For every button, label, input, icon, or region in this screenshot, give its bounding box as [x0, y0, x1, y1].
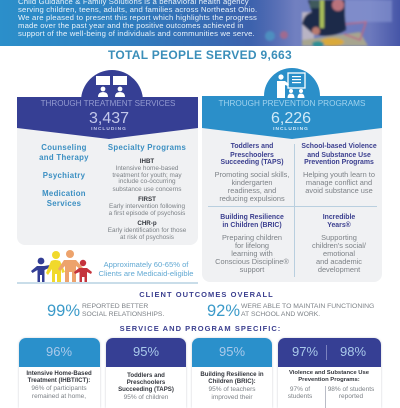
services list: Services	[47, 199, 81, 208]
program: Incredible Years: Incredible	[323, 214, 355, 221]
specialty programs: CHR-p	[137, 220, 157, 227]
header photo	[259, 0, 400, 46]
program: BRIC: in Children (BRIC)	[222, 222, 282, 229]
program: Incredible Years	[312, 214, 366, 274]
card: violence and substance use prevention	[278, 338, 381, 408]
horizontal divider	[208, 206, 377, 207]
specialty programs: Specialty Programs	[108, 143, 186, 152]
stat: 99 percent	[47, 302, 164, 320]
card: BRIC: 95% of teachers	[209, 386, 255, 393]
medicaid note: Clients are Medicaid-eligible	[99, 269, 193, 278]
specialty programs: FIRST	[138, 196, 156, 203]
panel: prevention programs	[202, 68, 382, 282]
card: violence and substance use prevention: reported	[339, 393, 363, 400]
specialty programs: treatment for youth; may	[112, 172, 182, 179]
program: TAPS: readiness, and	[228, 186, 276, 195]
program: school-based violence and substance use prevention: Helping youth learn to	[303, 170, 375, 179]
treatment background card	[17, 118, 198, 245]
program: Incredible Years: children's social/	[312, 241, 366, 250]
card: violence and substance use prevention: 97%	[292, 344, 318, 359]
specialty programs: include co-occurring	[118, 178, 176, 185]
program: Incredible Years: development	[318, 265, 360, 274]
prevention banner with icon	[202, 68, 382, 139]
program: TAPS: Succeeding (TAPS)	[220, 159, 284, 166]
card: IHBT: 96% of participants	[31, 385, 87, 392]
card: TAPS: 95%	[133, 344, 159, 359]
stat: 99 percent: SOCIAL RELATIONSHIPS.	[82, 311, 164, 318]
stat: 92 percent: 92%	[207, 302, 240, 320]
program: TAPS: Toddlers and	[231, 143, 273, 150]
card: IHBT: remained at home,	[32, 393, 86, 400]
card: IHBT: Treatment (IHBT/ICT):	[28, 377, 90, 384]
program: Incredible Years: and academic	[316, 257, 362, 266]
card: violence and substance use prevention: Prevention Programs:	[298, 377, 360, 383]
prevention heading: THROUGH PREVENTION PROGRAMS	[219, 99, 365, 108]
program: TAPS: reducing expulsions	[219, 194, 285, 203]
intro text: We are pleased to present this report which highlights the progress	[18, 13, 257, 22]
specialty programs: Intensive home-based	[116, 165, 178, 172]
card: IHBT: Intensive Home-Based	[26, 370, 92, 377]
vertical divider	[294, 144, 295, 277]
specialty programs: a first episode of psychosis	[109, 210, 185, 217]
card: BRIC: Children (BRIC):	[208, 378, 256, 385]
program: BRIC: for lifelong	[235, 241, 269, 250]
heading: service and program specific: SERVICE AND PROGRAM SPECIFIC:	[120, 324, 281, 333]
card: TAPS: Preschoolers	[127, 379, 165, 386]
card: violence and substance use prevention: students	[288, 393, 312, 400]
program: school-based violence and substance use prevention: avoid substance use	[305, 186, 373, 195]
stat: 92 percent: AT SCHOOL AND WORK.	[241, 311, 320, 318]
services list: and Therapy	[39, 153, 89, 162]
title: TOTAL PEOPLE SERVED 9,663	[108, 48, 292, 62]
program: Incredible Years: emotional	[323, 249, 355, 258]
intro text: serving children, teens, adults, and families across Northeast Ohio.	[18, 5, 257, 14]
services list: Medication	[42, 189, 86, 198]
program: TAPS: Promoting social skills,	[215, 170, 289, 179]
program: school-based violence and substance use prevention: manage conflict and	[306, 178, 372, 187]
program: BRIC: support	[240, 265, 264, 274]
treatment count: 3,437	[89, 110, 129, 127]
specialty programs: Early intervention following	[109, 203, 185, 210]
card: TAPS: Toddlers and	[127, 372, 165, 379]
specialty programs: substance use concerns	[113, 186, 181, 193]
card: violence and substance use prevention: 98% of students	[328, 386, 374, 393]
card: TAPS	[106, 338, 186, 408]
program: Incredible Years: Years®	[327, 222, 351, 229]
treatment banner with icon	[17, 70, 198, 139]
services list: Psychiatry	[43, 171, 85, 180]
specialty programs: Early identification for those	[108, 227, 186, 234]
specialty programs: IHBT	[140, 158, 154, 165]
program: Incredible Years: Supporting	[321, 233, 357, 242]
program: BRIC: learning with	[231, 249, 273, 258]
stat: 92 percent: WERE ABLE TO MAINTAIN FUNCTIONING	[241, 303, 374, 310]
card: IHBT	[19, 338, 100, 408]
card: violence and substance use prevention: 98%	[340, 344, 366, 359]
medicaid note: Approximately 60-65% of	[104, 260, 188, 269]
program: BRIC: Preparing children	[222, 233, 282, 242]
prevention background card	[202, 118, 382, 282]
services list	[39, 143, 89, 208]
card: TAPS: Succeeding (TAPS)	[118, 386, 174, 393]
card: violence and substance use prevention: 97% of	[290, 386, 310, 393]
treatment heading: THROUGH TREATMENT SERVICES	[41, 99, 175, 108]
card: TAPS: 95% of children	[124, 394, 168, 401]
intro text: made over the past year and the positive outcomes achieved in	[18, 21, 244, 30]
heading: client outcomes overall: CLIENT OUTCOMES OVERALL	[139, 290, 274, 299]
intro text	[18, 0, 257, 38]
card: BRIC: Building Resilience in	[200, 371, 264, 378]
specialty programs	[108, 143, 186, 241]
icon: family	[31, 250, 92, 282]
stat: 99 percent: 99%	[47, 302, 80, 320]
program: TAPS: kindergarten	[231, 178, 273, 187]
program: school-based violence and substance use prevention	[301, 142, 377, 195]
card: IHBT: 96%	[46, 344, 72, 359]
program: school-based violence and substance use prevention: and Substance Use	[307, 152, 371, 158]
card: violence and substance use prevention: Violence and Substance Use	[289, 370, 369, 376]
card: BRIC: 95%	[219, 344, 245, 359]
medicaid note	[98, 260, 194, 278]
stat: 99 percent: REPORTED BETTER	[82, 303, 148, 310]
panel: treatment services	[17, 70, 198, 245]
intro text: support of the well-being of individuals and communities we serve.	[18, 29, 255, 38]
treatment including: INCLUDING	[91, 127, 127, 132]
card: BRIC	[192, 338, 272, 408]
specialty programs: at risk of psychosis	[120, 234, 174, 241]
program: BRIC	[215, 214, 289, 274]
prevention including: INCLUDING	[273, 127, 309, 132]
stat: 92 percent	[207, 302, 374, 320]
program: BRIC: Building Resilience	[220, 214, 284, 221]
program: school-based violence and substance use prevention: Prevention Programs	[304, 159, 374, 166]
program: BRIC: Conscious Discipline®	[215, 257, 289, 266]
program: TAPS: Preschoolers	[230, 152, 274, 158]
header banner	[0, 0, 400, 46]
services list: Counseling	[41, 143, 87, 152]
prevention count: 6,226	[271, 110, 311, 127]
card: BRIC: improved their	[211, 394, 253, 401]
program: TAPS	[215, 142, 289, 203]
program: school-based violence and substance use prevention: School-based Violence	[301, 143, 377, 150]
